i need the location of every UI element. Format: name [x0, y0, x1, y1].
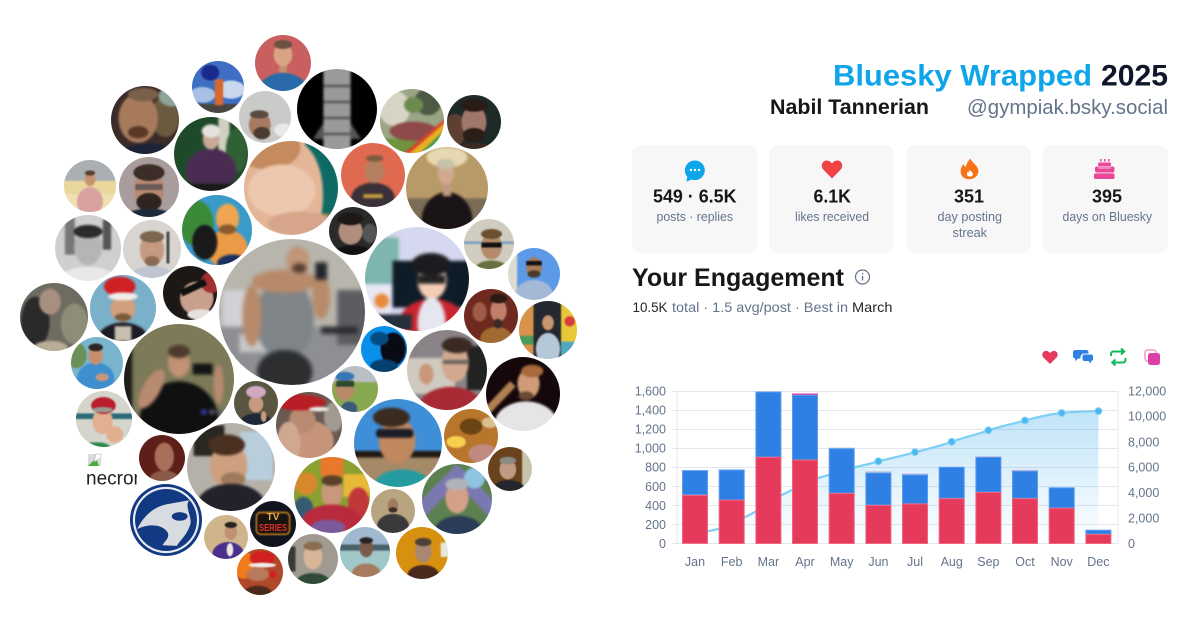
- stat card: posts and replies: posts · replies: [656, 209, 733, 224]
- icon: reposts: [1111, 348, 1126, 366]
- avatar: man with sunglasses: [464, 219, 514, 269]
- right axis labels: 8,000: [1128, 436, 1159, 450]
- bars: likes: [682, 457, 1111, 544]
- avatar: man in black shirt in hall: [406, 147, 488, 229]
- avatar: bald man on stone wall: [367, 485, 419, 538]
- avatar: TV Series logo: SERIES: [259, 522, 287, 534]
- bars: replies: [682, 392, 1111, 534]
- stat card: likes received: likes received: [795, 209, 869, 224]
- avatar: figure with blue umbrella: [192, 61, 244, 113]
- avatar: man with helmet in field: [332, 366, 378, 412]
- left axis labels: 400: [645, 499, 666, 513]
- avatar: grey-haired man with geometric lines: [415, 457, 499, 545]
- month labels: Dec: [1087, 555, 1110, 569]
- avatar: close-up with black glasses: [163, 266, 217, 320]
- stat card: posts and replies: 549 · 6.5K: [653, 186, 736, 206]
- avatar: man with sunglasses under blue sky: [508, 248, 560, 300]
- avatar: man in purple suit: [200, 511, 252, 566]
- grid lines and axes: [672, 391, 1118, 544]
- right axis labels: [1128, 384, 1166, 551]
- avatar: man with round sunglasses, blue sky: [354, 399, 442, 487]
- avatar: person lying near rainbow: [380, 89, 444, 153]
- month labels: May: [830, 555, 854, 569]
- avatar: black and white portrait: [55, 215, 121, 281]
- icon: cake: [1094, 159, 1114, 179]
- broken image with clipped text: necromancer: [86, 468, 198, 490]
- icon: flame: [961, 158, 978, 179]
- icon: heart: [822, 161, 842, 178]
- avatar: man in white shirt on dark background: [486, 357, 560, 431]
- month labels: [685, 555, 1110, 569]
- avatar: blue panther logo: [123, 477, 209, 563]
- right axis labels: 12,000: [1128, 384, 1166, 398]
- right axis labels: 4,000: [1128, 486, 1159, 500]
- avatar: man at red wall: [255, 35, 311, 91]
- avatar: man with bicycles: [20, 283, 88, 351]
- right axis labels: 0: [1128, 537, 1135, 551]
- avatar: shirtless man in santa hat: [276, 392, 342, 458]
- avatar: man smiling with posters: [178, 414, 284, 528]
- avatar: man in santa hat on orange: [232, 544, 288, 600]
- month labels: Mar: [758, 555, 779, 569]
- stat card: posting streak: streak: [952, 225, 987, 240]
- avatar: white-haired person in purple cape: [174, 117, 248, 191]
- chart legend: [1042, 348, 1160, 366]
- left axis labels: 1,000: [635, 442, 666, 456]
- avatar: grey-haired man with beard: [123, 220, 181, 278]
- icon: info: [856, 270, 870, 284]
- avatar: man on ceiling background: [239, 91, 291, 143]
- cumulative line: [695, 411, 1098, 534]
- avatar: man with puppets: [286, 449, 378, 542]
- avatar: cartoon man with black dog: [182, 195, 252, 265]
- heading: Your Engagement: Your Engagement: [632, 264, 845, 292]
- month labels: Oct: [1015, 555, 1035, 569]
- stat card: days on Bluesky: 395: [1092, 186, 1122, 206]
- avatar: two men on red background: [464, 289, 518, 343]
- stat card: days on Bluesky: [1043, 145, 1168, 253]
- stat card: likes received: [769, 145, 894, 253]
- avatar: man in hawaiian shirt: [71, 337, 123, 389]
- engagement summary: 10.5K: [632, 299, 668, 315]
- avatar: man making peace sign: [407, 330, 487, 410]
- broken image with clipped text: [87, 454, 137, 484]
- left axis labels: 1,200: [635, 422, 666, 436]
- left axis labels: 1,600: [635, 384, 666, 398]
- avatar: dark-haired bearded man: [447, 95, 501, 149]
- cumulative area: [695, 411, 1098, 544]
- title: Bluesky Wrapped: [833, 60, 1092, 92]
- stat card: likes received: 6.1K: [814, 186, 851, 206]
- left axis labels: 1,400: [635, 404, 666, 418]
- avatar: man in santa hat eating: [76, 391, 132, 447]
- avatar: muscular shoulder: [244, 141, 338, 235]
- icon: replies: [1073, 350, 1093, 364]
- stat card: days on Bluesky: days on Bluesky: [1062, 209, 1152, 224]
- bars: other engagement: [792, 394, 1038, 475]
- chart: engagement by month: [635, 384, 1166, 569]
- avatar: man at red patterned wall: [341, 143, 405, 207]
- month labels: Nov: [1051, 555, 1074, 569]
- month labels: Jul: [907, 555, 923, 569]
- right axis labels: 2,000: [1128, 512, 1159, 526]
- avatar: brown engraved profile: [139, 435, 185, 481]
- avatar: dark-haired man: [329, 207, 377, 255]
- icon: broken image: [88, 454, 101, 466]
- right axis labels: 10,000: [1128, 410, 1166, 424]
- left axis labels: 600: [645, 480, 666, 494]
- avatar: blue engraving: [361, 326, 407, 372]
- stat card: posting streak: [906, 145, 1031, 253]
- month labels: Feb: [721, 555, 743, 569]
- left axis labels: 800: [645, 460, 666, 474]
- avatar: TV Series logo: [245, 496, 301, 552]
- avatar: anime character with glasses: [365, 227, 469, 331]
- right axis labels: 6,000: [1128, 460, 1159, 474]
- avatar: bearded man with glasses: [119, 157, 179, 217]
- stat card: posts and replies: [632, 145, 757, 253]
- month labels: Jan: [685, 555, 705, 569]
- user name: Nabil Tannerian: [770, 96, 929, 119]
- avatar: man at orange wall: [391, 522, 453, 587]
- icon: likes: [1042, 351, 1058, 364]
- month labels: Aug: [941, 555, 963, 569]
- stat card: posting streak: day posting: [938, 209, 1002, 224]
- avatar: man at beach: [335, 522, 395, 584]
- month labels: Apr: [795, 555, 815, 569]
- engagement summary: total · 1.5 avg/post · Best in: [672, 299, 848, 315]
- stat card: posting streak: 351: [954, 186, 984, 206]
- avatar: older man in suit: [484, 443, 536, 498]
- icon: speech bubble: [685, 160, 705, 182]
- avatar: man in santa hat: [90, 275, 156, 341]
- title: 2025: [1101, 60, 1168, 92]
- month labels: Sep: [977, 555, 1000, 569]
- avatar: gym mirror selfie (largest): [219, 239, 365, 385]
- avatar: man in pink sweater: [64, 160, 116, 212]
- avatar: man in pink bear hat: [234, 381, 278, 425]
- avatar cluster: [13, 29, 583, 600]
- avatar: sunset silhouette: [444, 409, 498, 463]
- month labels: Jun: [868, 555, 889, 569]
- left axis labels: [635, 384, 666, 551]
- engagement summary: [632, 299, 892, 315]
- left axis labels: 200: [645, 518, 666, 532]
- avatar: man at rainbow wall: [519, 301, 577, 359]
- avatar: selfie in black sweater: [124, 324, 234, 434]
- icon: quotes: [1145, 350, 1160, 365]
- avatar: man in green jacket: [283, 529, 343, 594]
- avatar: black tower: [297, 69, 377, 149]
- cumulative points: [875, 408, 1102, 465]
- avatar: TV Series logo: TV: [267, 512, 280, 523]
- avatar: man with moustache: [111, 86, 179, 154]
- handle: @gympiak.bsky.social: [967, 97, 1168, 119]
- engagement summary: March: [852, 299, 892, 315]
- left axis labels: 0: [659, 537, 666, 551]
